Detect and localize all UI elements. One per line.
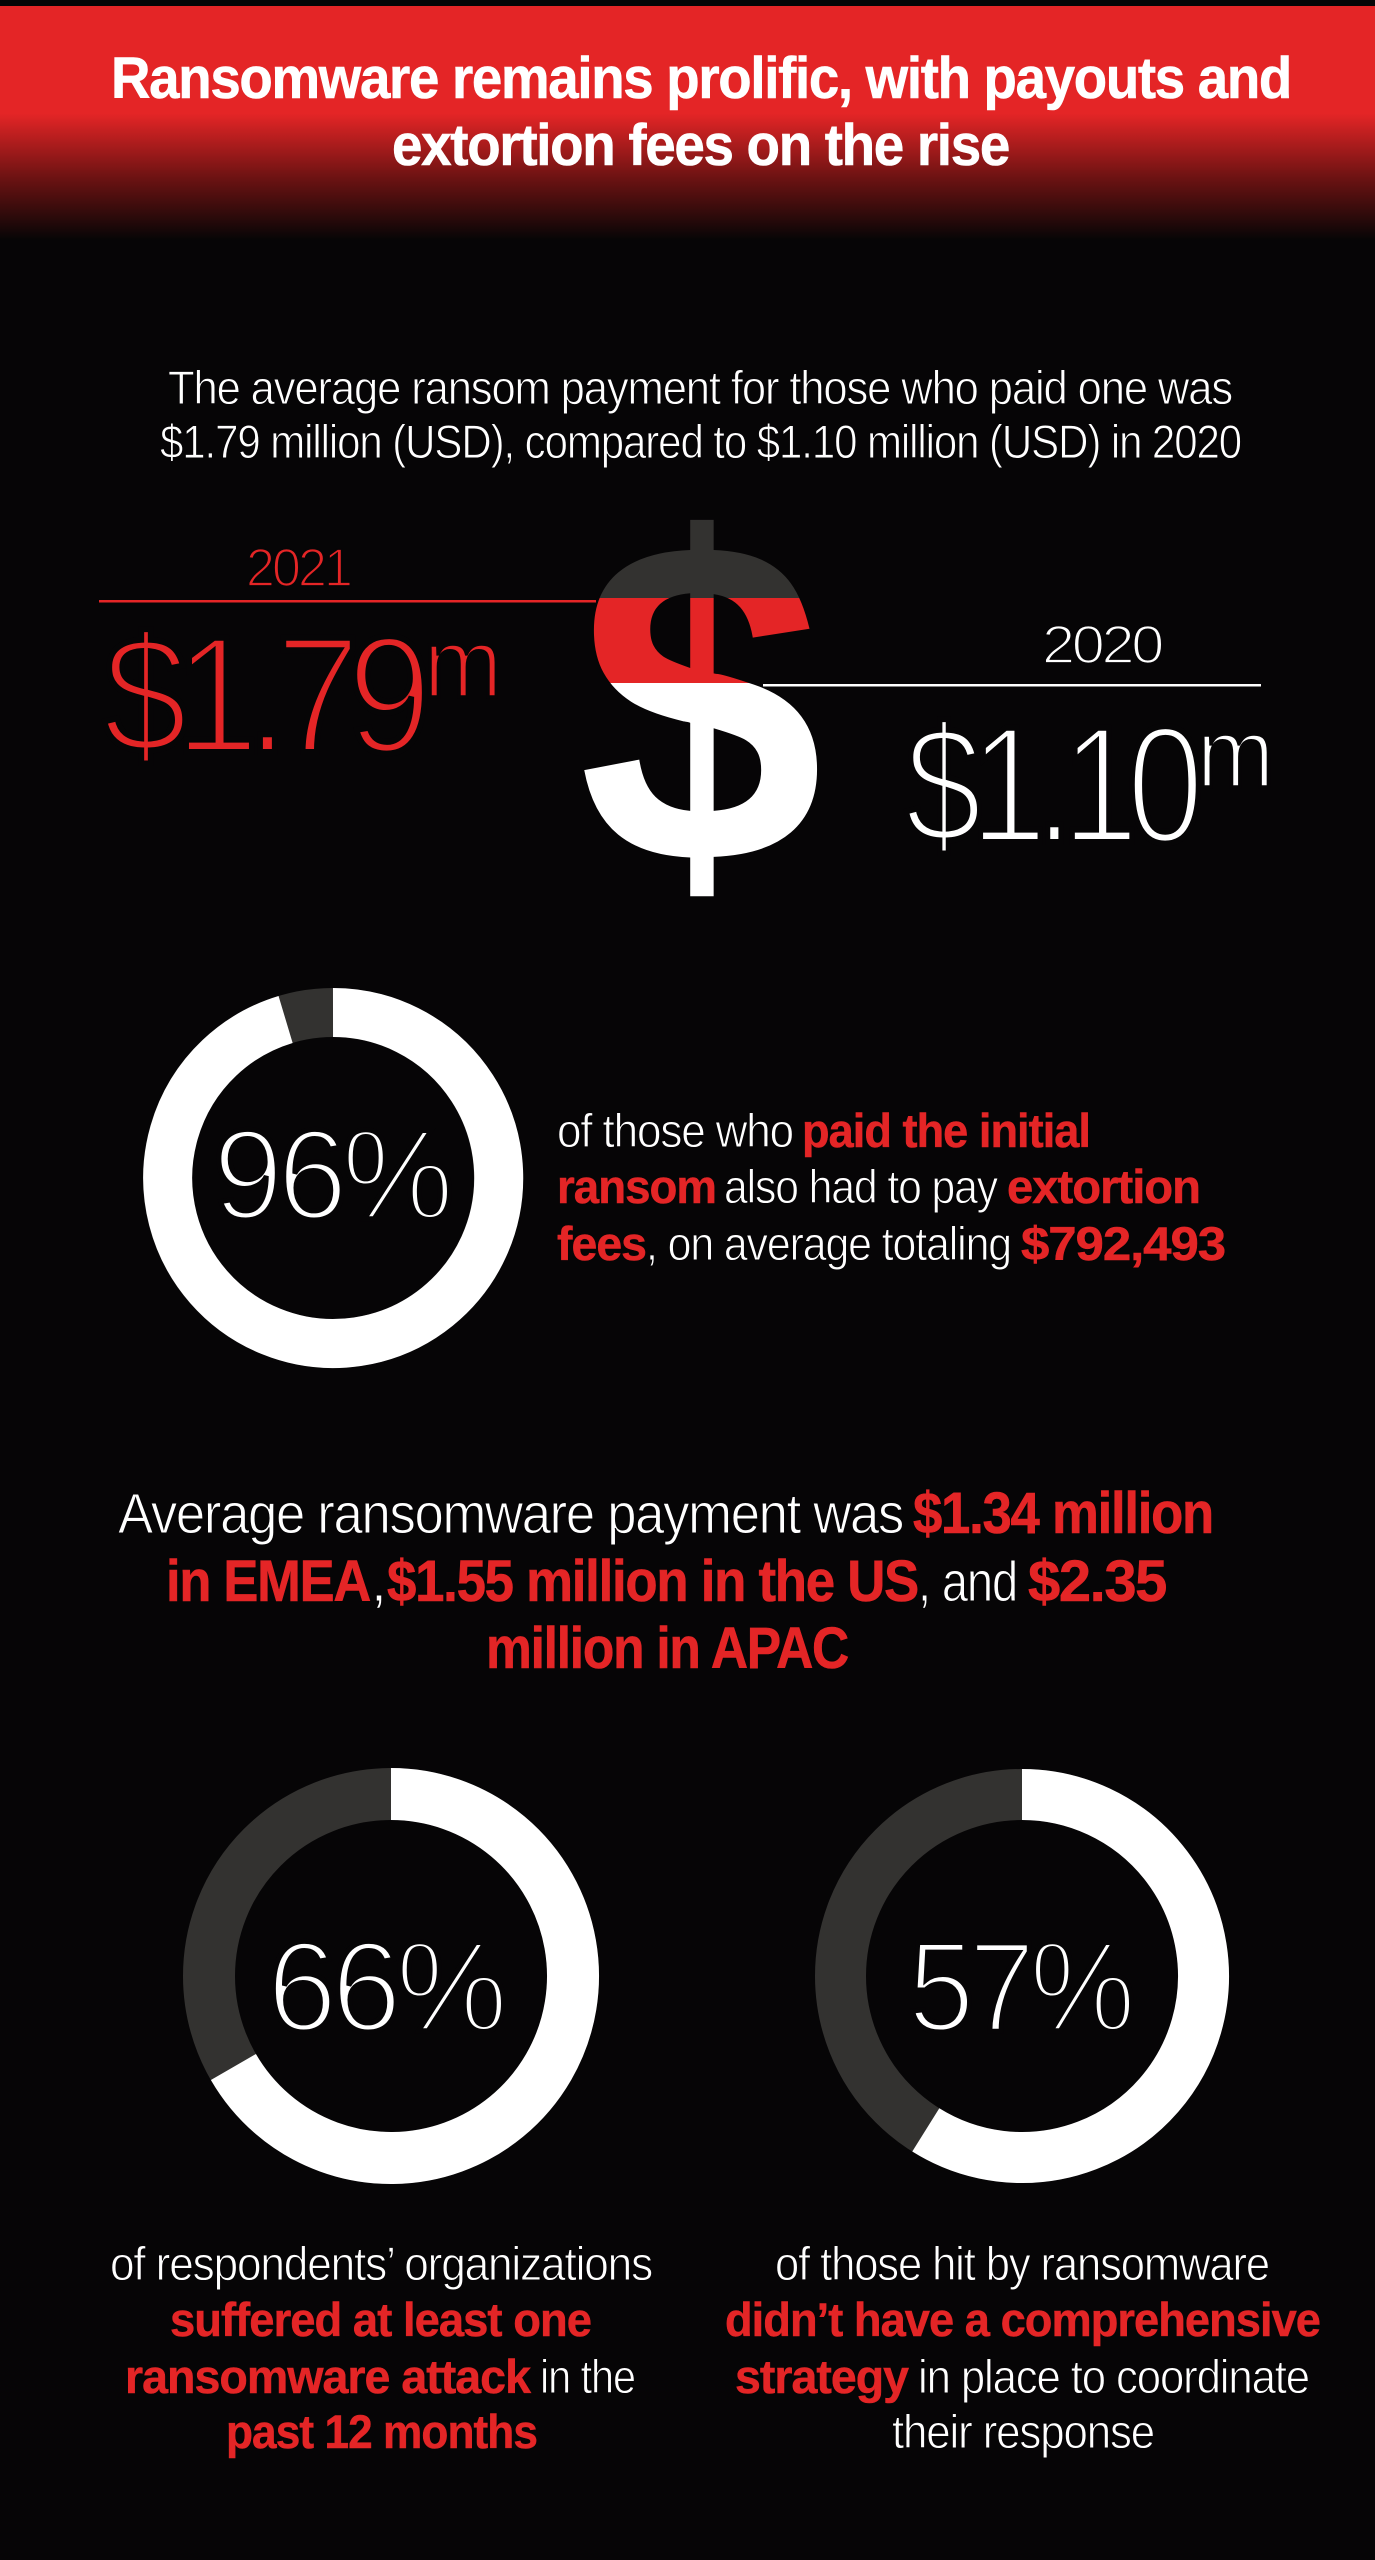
regional payment text: $1.55 million in the US (387, 1549, 918, 1614)
panel: payment comparison (99, 445, 1274, 960)
extortion fees text (557, 1104, 1225, 1270)
regional payment text (118, 1481, 1213, 1681)
2020 value: 2020 (1042, 615, 1162, 675)
attack text: of respondents’ organizations (110, 2237, 652, 2290)
regional payment text: $1.34 million (913, 1481, 1213, 1546)
2021 value: $1.79 (103, 603, 425, 788)
icon: segmented dollar sign: $ (578, 445, 823, 960)
title: extortion fees on the rise (392, 113, 1009, 178)
strategy text (725, 2237, 1320, 2458)
panel: header banner (0, 6, 1375, 240)
2020 value: $1.10 (905, 693, 1198, 878)
attack text: past 12 months (226, 2405, 537, 2458)
donut chart: 66% (209, 1794, 573, 2158)
regional payment text: , and (918, 1550, 1017, 1614)
2021 value (99, 538, 596, 788)
extortion fees text: , on average totaling (646, 1217, 1011, 1270)
title: Ransomware remains prolific, with payouts and (111, 46, 1291, 111)
strategy text: their response (892, 2405, 1154, 2458)
2020 value (763, 615, 1274, 878)
strategy text: strategy (735, 2350, 909, 2403)
strategy text: in place to coordinate (918, 2350, 1309, 2403)
intro text: $1.79 million (USD), compared to $1.10 million (USD) in 2020 (160, 415, 1241, 468)
regional payment text: Average ransomware payment was (118, 1482, 903, 1546)
extortion fees text: $792,493 (1021, 1217, 1225, 1270)
extortion fees text: fees (557, 1217, 646, 1270)
title (111, 46, 1291, 178)
regional payment text: , (371, 1550, 385, 1614)
attack text (110, 2237, 652, 2458)
donut chart: 57%: 57% (908, 1916, 1132, 2059)
panel: 96% extortion fees (168, 1012, 1225, 1344)
extortion fees text: also had to pay (724, 1160, 999, 1213)
attack text: suffered at least one (170, 2293, 591, 2346)
regional payment text: $2.35 (1028, 1549, 1166, 1614)
attack text: in the (540, 2350, 635, 2403)
donut chart: 96%: 96% (213, 1104, 450, 1247)
extortion fees text: paid the initial (802, 1104, 1090, 1157)
2021 value: m (424, 608, 502, 718)
strategy text: of those hit by ransomware (775, 2237, 1269, 2290)
donut chart: 96% (168, 1012, 499, 1344)
extortion fees text: ransom (557, 1160, 716, 1213)
2020 value: m (1196, 698, 1274, 808)
extortion fees text: extortion (1007, 1160, 1200, 1213)
regional payment text: in EMEA (166, 1549, 370, 1614)
intro text: The average ransom payment for those who paid one was (168, 361, 1232, 414)
donut chart: 57% (840, 1794, 1204, 2158)
2021 value: 2021 (246, 538, 351, 598)
panel: 66% attacked (110, 1794, 652, 2458)
panel: 57% no strategy (725, 1794, 1320, 2458)
strategy text: didn’t have a comprehensive (725, 2293, 1320, 2346)
extortion fees text: of those who (557, 1104, 793, 1157)
regional payment text: million in APAC (486, 1616, 848, 1681)
donut chart: 66%: 66% (267, 1916, 504, 2059)
intro text (160, 361, 1241, 468)
attack text: ransomware attack (125, 2350, 532, 2403)
red gradient band (0, 6, 1375, 240)
